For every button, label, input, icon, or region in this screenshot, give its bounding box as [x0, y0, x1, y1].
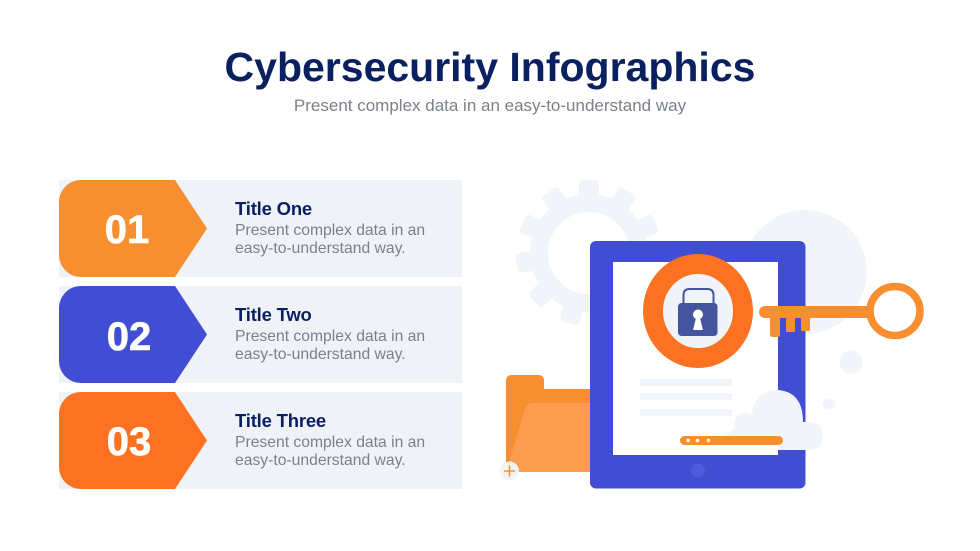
title: Cybersecurity Infographics	[225, 44, 755, 90]
tablet screen	[613, 262, 778, 455]
panel: item one: Title One	[235, 198, 312, 219]
icon: folder	[500, 375, 592, 480]
panel: item three: Title Three	[235, 410, 326, 431]
icon: cloud	[725, 390, 823, 450]
panel: item three: easy-to-understand way.	[235, 452, 406, 468]
panel: item two	[59, 286, 462, 383]
decorative circle: medium	[840, 350, 862, 374]
panel: item two: Present complex data in an	[235, 328, 425, 345]
password field	[680, 436, 783, 445]
decorative circle: large	[743, 210, 867, 334]
panel: item one: 01	[105, 208, 149, 252]
panel: item two: easy-to-understand way.	[235, 346, 406, 362]
decorative circle: small	[822, 398, 836, 410]
panel: item one: Present complex data in an	[235, 222, 425, 239]
icon: plus badge	[500, 462, 519, 480]
panel: item two: 02	[107, 315, 151, 359]
subtitle: Present complex data in an easy-to-understand way	[294, 96, 686, 115]
panel: item three	[59, 392, 462, 489]
panel: item two: Title Two	[235, 304, 312, 325]
panel: item one: easy-to-understand way.	[235, 240, 406, 256]
tablet home button	[691, 464, 705, 478]
panel: item one	[59, 180, 462, 277]
tablet	[590, 241, 806, 488]
document lines	[640, 379, 732, 416]
icon: key	[759, 286, 920, 337]
icon: gear	[515, 180, 663, 326]
panel: item three: Present complex data in an	[235, 434, 425, 451]
panel: item three: 03	[107, 420, 151, 464]
icon: padlock	[653, 264, 743, 358]
